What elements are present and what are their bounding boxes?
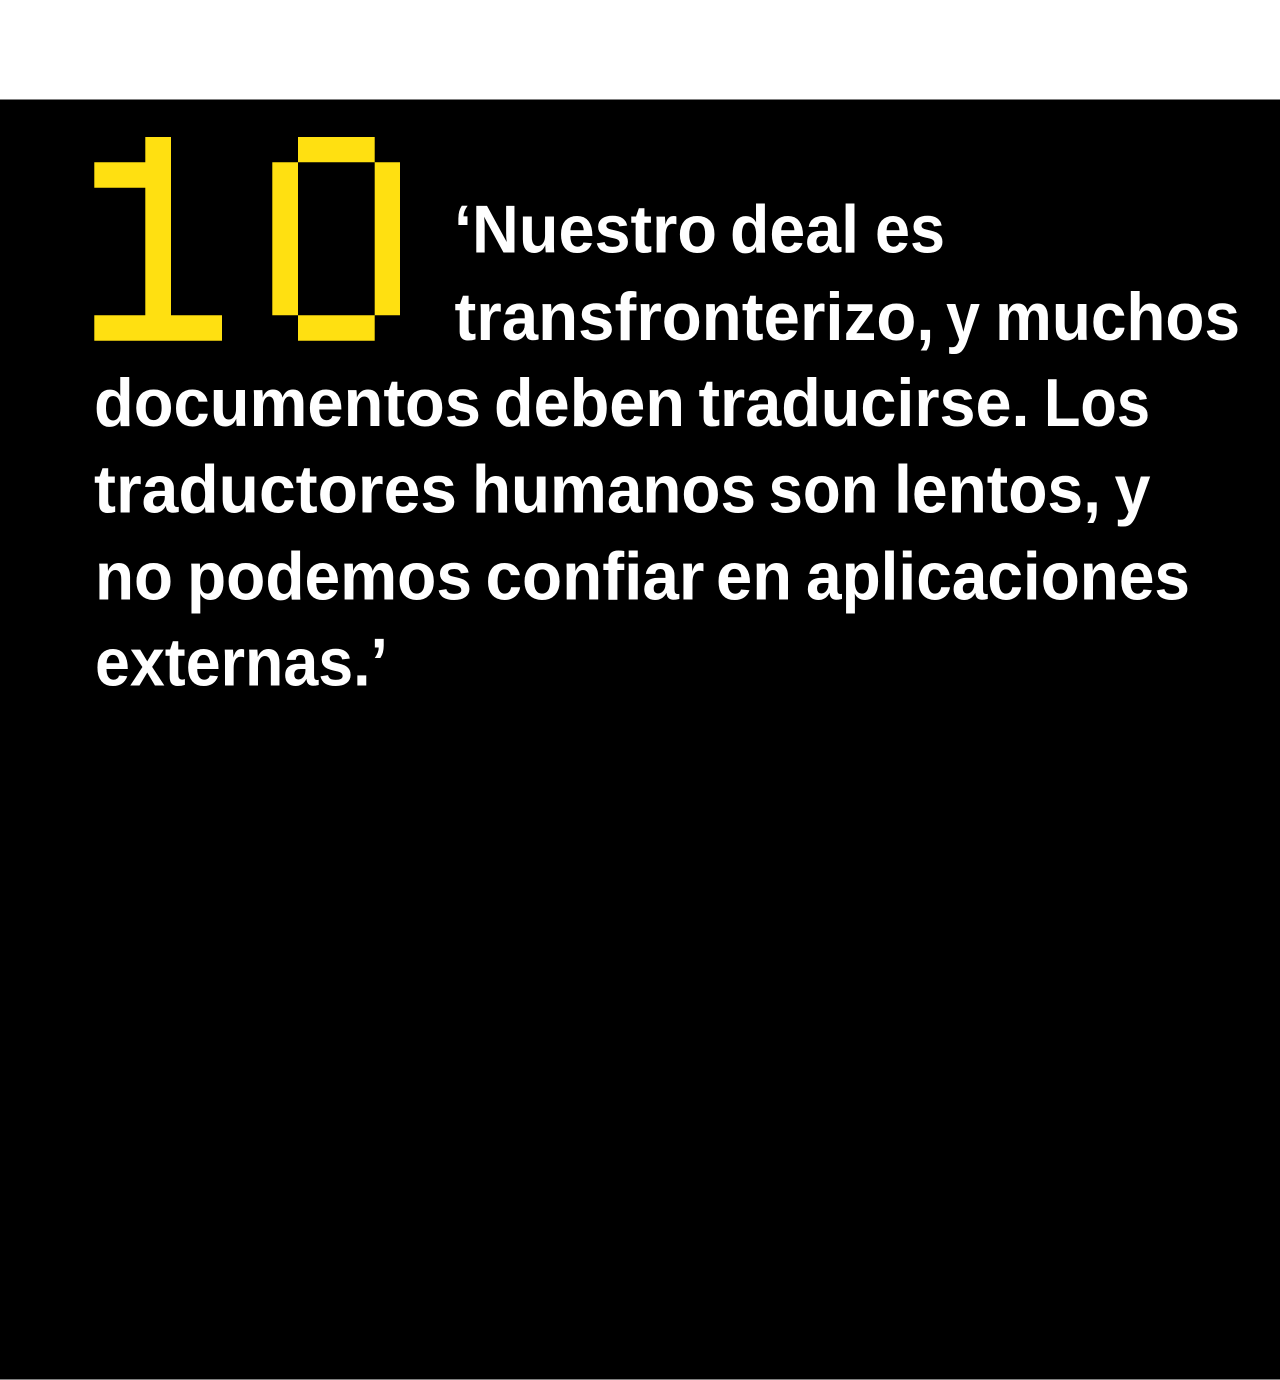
quote text: deben	[494, 365, 685, 441]
quote text	[94, 192, 1240, 700]
quote text: podemos	[187, 538, 472, 614]
pixel numeral: 10	[94, 137, 400, 341]
quote text: externas.’	[95, 624, 388, 700]
quote text: Los	[1044, 365, 1150, 441]
quote text: lentos,	[894, 452, 1101, 528]
quote text: traducirse.	[698, 365, 1030, 441]
quote text: son	[768, 452, 878, 528]
quote text: aplicaciones	[806, 538, 1190, 614]
quote text: no	[95, 538, 173, 614]
digit: 1	[94, 137, 222, 341]
quote text: ‘Nuestro	[454, 192, 717, 268]
quote text: y	[946, 279, 980, 355]
quote text: transfronterizo,	[454, 279, 934, 355]
quote text: deal	[730, 192, 859, 268]
quote text: muchos	[995, 279, 1240, 355]
quote text: y	[1114, 452, 1151, 528]
quote text: es	[875, 192, 945, 268]
quote text: humanos	[472, 452, 756, 528]
digit: 0	[272, 137, 400, 341]
quote text: confiar	[486, 538, 704, 614]
quote text: en	[716, 538, 792, 614]
quote text: traductores	[94, 452, 457, 528]
quote text: documentos	[94, 365, 481, 441]
